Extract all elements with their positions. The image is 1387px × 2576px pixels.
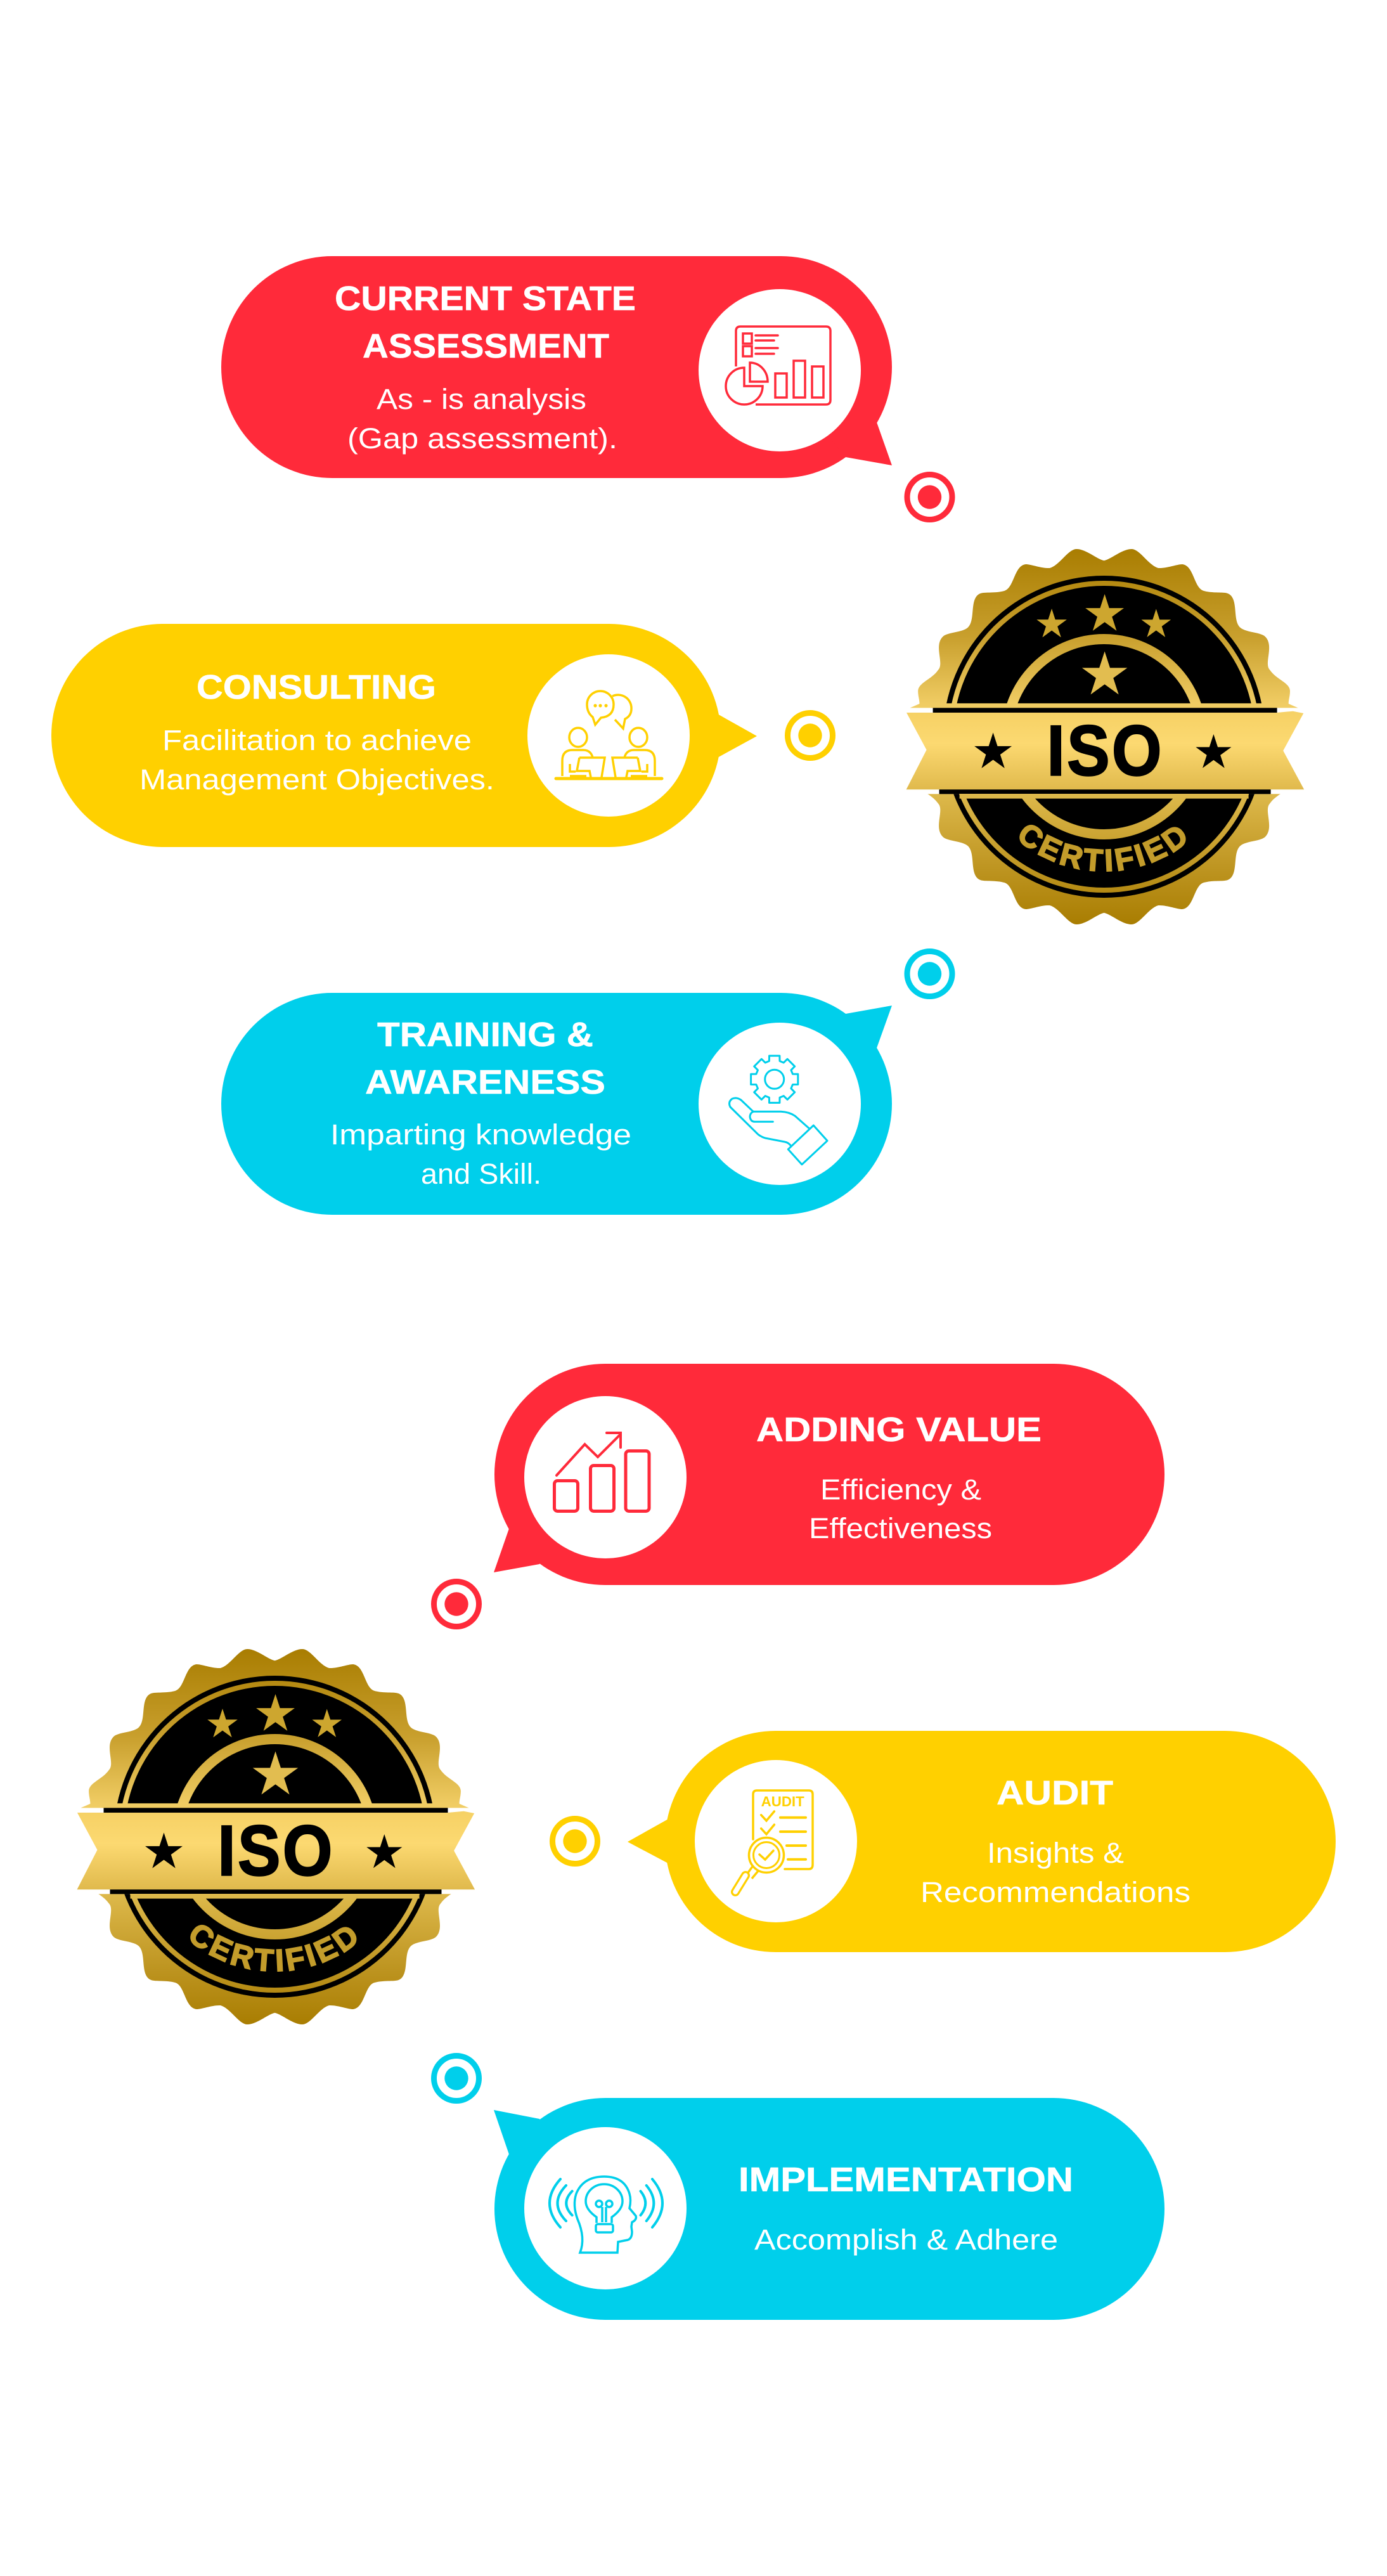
description [139, 724, 494, 796]
ISO label: ISO [217, 1811, 335, 1891]
stars [207, 1694, 342, 1794]
panel: implementation [434, 2055, 1164, 2320]
speech bubble [221, 256, 892, 478]
ribbon stars [145, 1832, 402, 1868]
speech bubble [494, 2098, 1164, 2320]
badge: ISO certified (bottom) [77, 1649, 475, 2024]
description [330, 1118, 631, 1190]
heading: TRAINING & [377, 1016, 593, 1054]
panel: current state assessment [221, 256, 952, 520]
heading: CONSULTING [197, 668, 436, 706]
description: and Skill. [421, 1158, 541, 1190]
description [809, 1473, 992, 1544]
stars [1036, 594, 1171, 694]
speech bubble [51, 624, 757, 847]
icon: consultants talking [527, 654, 690, 817]
icon: head with light bulb [524, 2127, 687, 2289]
panel: consulting [51, 624, 833, 847]
description: As - is analysis [377, 383, 586, 415]
marker dot [787, 713, 833, 758]
panel: audit [553, 1731, 1336, 1952]
description: Accomplish & Adhere [754, 2223, 1058, 2256]
ribbon stars [974, 733, 1231, 768]
speech bubble [628, 1731, 1336, 1952]
heading: ASSESSMENT [363, 327, 609, 365]
description: Insights & [987, 1837, 1124, 1869]
description [920, 1837, 1190, 1908]
CERTIFIED label: CERTIFIED [190, 1925, 356, 1972]
heading [365, 1016, 605, 1101]
marker dot [907, 474, 952, 520]
icon: hand holding gear [699, 1023, 861, 1185]
description: Effectiveness [809, 1512, 992, 1544]
icon: growth bars [524, 1396, 687, 1558]
marker dot [434, 2055, 479, 2101]
seal [910, 549, 1298, 924]
description: Efficiency & [820, 1473, 981, 1506]
heading [335, 280, 636, 365]
panel: training and awareness [221, 951, 952, 1215]
marker dot [553, 1818, 597, 1864]
ribbon band [895, 703, 1313, 799]
heading: IMPLEMENTATION [739, 2161, 1073, 2199]
heading: CURRENT STATE [335, 280, 636, 318]
description: Facilitation to achieve [162, 724, 472, 756]
description: Management Objectives. [139, 763, 494, 796]
seal [81, 1649, 469, 2024]
icon: audit checklist [695, 1760, 857, 1922]
speech bubble [221, 993, 892, 1215]
heading: AUDIT [997, 1774, 1113, 1812]
speech bubble [494, 1364, 1164, 1585]
panel: adding value [434, 1364, 1164, 1627]
description: (Gap assessment). [347, 422, 617, 455]
heading: ADDING VALUE [756, 1411, 1042, 1449]
heading: AWARENESS [365, 1063, 605, 1101]
ribbon band [66, 1803, 484, 1899]
ISO label: ISO [1047, 711, 1164, 791]
marker dot [434, 1581, 479, 1627]
icon: audit checklist: AUDIT [761, 1794, 804, 1809]
description: Imparting knowledge [330, 1118, 631, 1151]
description: Recommendations [920, 1876, 1190, 1908]
description [347, 383, 617, 455]
badge: ISO certified (top) [906, 549, 1305, 924]
marker dot [907, 951, 952, 997]
CERTIFIED label: CERTIFIED [1019, 824, 1186, 872]
icon: dashboard report [699, 289, 861, 451]
